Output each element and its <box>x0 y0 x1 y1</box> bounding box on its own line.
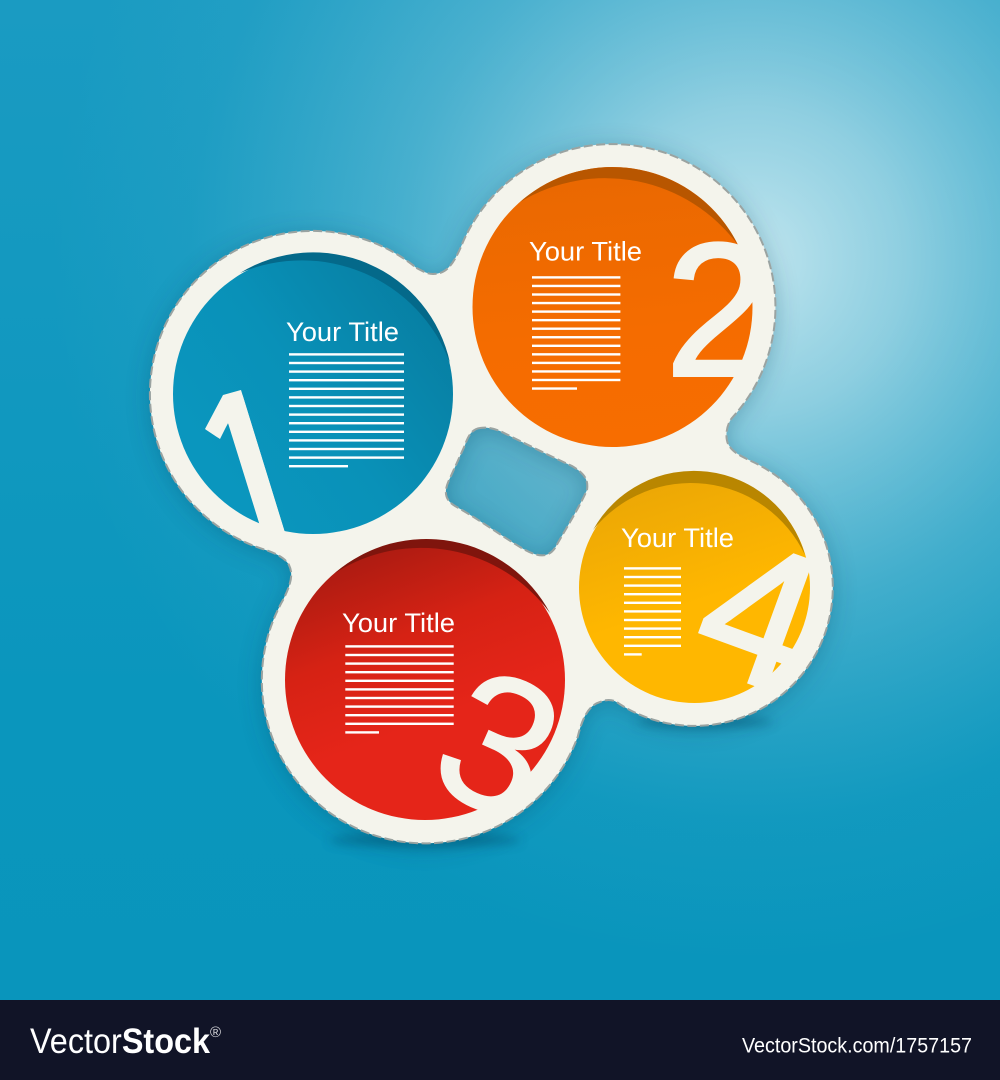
centre opening tint <box>446 428 587 555</box>
panel: step 3 red circle <box>285 539 565 820</box>
panel: step 1 blue circle <box>173 252 453 534</box>
step 4 disc <box>579 472 810 703</box>
step 1 crescent shadow <box>240 252 450 363</box>
footer logo: VectorStock <box>30 1022 210 1061</box>
panel: step 4 yellow circle <box>579 470 810 703</box>
registered mark: ® <box>210 1024 221 1041</box>
ground shadows <box>330 716 773 847</box>
panel: step 2 orange circle <box>472 167 771 447</box>
step 3 text lines <box>345 645 454 734</box>
step 4 text lines <box>624 567 681 656</box>
step 1 text lines <box>289 353 404 467</box>
step 2 disc <box>472 167 752 447</box>
step 4 numeral: 4 <box>672 494 848 736</box>
footer image id: VectorStock.com/1757157 <box>742 1035 972 1058</box>
step 2 numeral: 2 <box>665 204 771 416</box>
step 3 numeral: 3 <box>406 624 591 864</box>
step 3 disc <box>285 540 565 820</box>
step 2 title: Your Title <box>529 237 642 267</box>
step 1 title: Your Title <box>286 317 399 347</box>
cream connected frame with dashed edge <box>150 144 833 843</box>
step 4 crescent shadow <box>593 471 805 555</box>
step 2 crescent shadow <box>520 167 738 245</box>
step 4 title: Your Title <box>621 523 734 553</box>
footer bar <box>0 1000 1000 1080</box>
step 3 title: Your Title <box>342 608 455 638</box>
step 1 disc <box>173 254 453 534</box>
step 2 text lines <box>532 276 620 390</box>
step 1 numeral: 1 <box>163 336 346 601</box>
step 3 crescent shadow <box>335 539 550 613</box>
